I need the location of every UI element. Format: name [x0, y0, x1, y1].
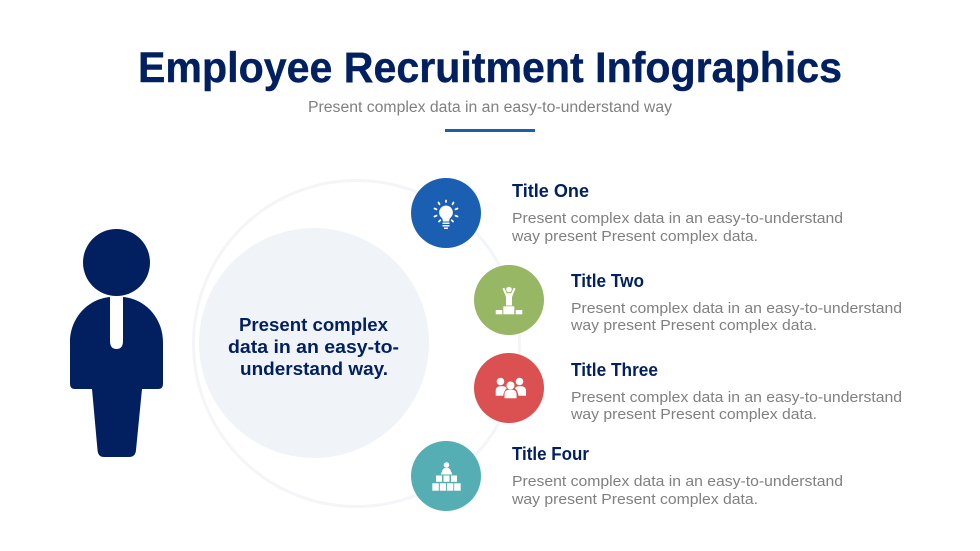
text block: title three: way present Present complex data. [570, 406, 817, 423]
text block: title one: way present Present complex data. [511, 228, 758, 245]
text block: title three [570, 360, 902, 423]
text block: title four [511, 444, 843, 508]
central circle panel [199, 228, 429, 458]
outer ring [194, 180, 520, 506]
subtitle: Present complex data in an easy-to-understand way [308, 99, 672, 116]
title underline [445, 129, 535, 132]
text block: title two: way present Present complex data. [570, 317, 817, 334]
text block: title two: Present complex data in an easy-to-understand [571, 300, 902, 317]
item one: icon lightbulb [411, 178, 481, 248]
text block: title three: Title Three [571, 360, 658, 380]
text block: title four: Title Four [512, 444, 589, 464]
icon: person with tie [70, 229, 163, 457]
central text: data in an easy-to- [228, 336, 399, 357]
item four: icon team pyramid [411, 441, 481, 511]
text block: title one: Present complex data in an easy-to-understand [512, 210, 843, 227]
title: Employee Recruitment Infographics [138, 44, 842, 92]
text block: title one: Title One [512, 181, 589, 201]
text block: title four: way present Present complex data. [511, 491, 758, 508]
central text: understand way. [240, 358, 388, 379]
text block: title four: Present complex data in an easy-to-understand [512, 473, 843, 490]
text block: title one [511, 181, 843, 245]
text block: title two [570, 271, 902, 334]
item two: icon person on podium [474, 265, 544, 335]
item three: icon group of people [474, 353, 544, 423]
central text: Present complex [239, 314, 389, 335]
central text [228, 314, 399, 379]
text block: title two: Title Two [571, 271, 644, 291]
text block: title three: Present complex data in an easy-to-understand [571, 389, 902, 406]
